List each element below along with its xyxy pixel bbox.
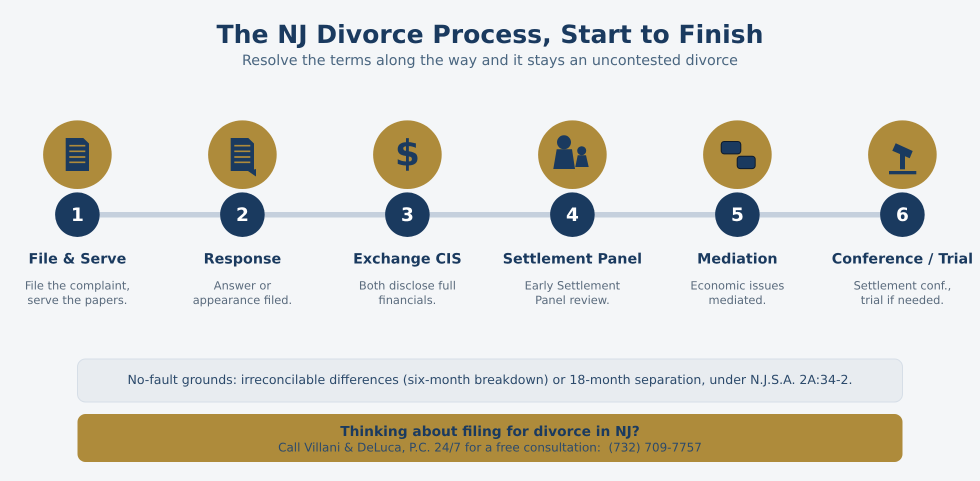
- step heading: File & Serve: [29, 252, 126, 268]
- step description: Economic issues: [690, 278, 784, 292]
- icon: gavel: [868, 120, 937, 189]
- number badge 4: [550, 192, 595, 237]
- icon: document with arrow: [208, 120, 277, 189]
- call to action banner: [78, 414, 902, 462]
- step 2: Response: [193, 120, 292, 307]
- call to action banner: Thinking about filing for divorce in NJ?: [340, 424, 640, 440]
- number badge 1: [55, 192, 100, 237]
- number badge 6: 6: [896, 205, 909, 226]
- step description: File the complaint,: [25, 278, 130, 292]
- number badge 2: 2: [236, 205, 249, 226]
- icon: speech boxes: [703, 120, 772, 189]
- step description: Answer or: [214, 278, 271, 292]
- step description: Panel review.: [535, 293, 610, 307]
- step heading: Response: [204, 252, 281, 268]
- step description: financials.: [379, 293, 436, 307]
- step heading: Settlement Panel: [503, 252, 642, 268]
- step description: trial if needed.: [861, 293, 944, 307]
- step 3: Exchange CIS: [353, 120, 462, 307]
- call to action banner: Call Villani & DeLuca, P.C. 24/7 for a free consultation: (732) 709-7757: [278, 440, 702, 454]
- step 6: Conference / Trial: [832, 120, 973, 307]
- icon: dollar sign: [373, 120, 442, 189]
- step 1: File & Serve: [25, 120, 130, 307]
- step heading: Mediation: [697, 252, 778, 268]
- step 4: Settlement Panel: [503, 120, 642, 307]
- icon: dollar sign: $: [395, 134, 420, 174]
- note panel: no-fault grounds: [78, 359, 902, 402]
- title: The NJ Divorce Process, Start to Finish: [217, 20, 763, 49]
- note panel: no-fault grounds: No-fault grounds: irreconcilable differences (six-month breakdown) or 18-month separation, under N.J.S.A. 2A:34-2.: [128, 372, 852, 387]
- number badge 3: [385, 192, 430, 237]
- number badge 4: 4: [566, 205, 579, 226]
- icon: document: [43, 120, 112, 189]
- number badge 1: 1: [71, 205, 84, 226]
- number badge 2: [220, 192, 265, 237]
- step description: mediated.: [708, 293, 766, 307]
- step description: Both disclose full: [359, 278, 456, 292]
- step description: serve the papers.: [27, 293, 127, 307]
- step heading: Exchange CIS: [353, 252, 462, 268]
- timeline line: [77, 212, 902, 218]
- step heading: Conference / Trial: [832, 252, 973, 268]
- step description: Early Settlement: [525, 278, 621, 292]
- number badge 5: [715, 192, 760, 237]
- icon: two people: [538, 120, 607, 189]
- number badge 3: 3: [401, 205, 414, 226]
- number badge 6: [880, 192, 925, 237]
- step description: appearance filed.: [193, 293, 292, 307]
- subtitle: Resolve the terms along the way and it stays an uncontested divorce: [242, 53, 738, 69]
- number badge 5: 5: [731, 205, 744, 226]
- step description: Settlement conf.,: [854, 278, 951, 292]
- step 5: Mediation: [690, 120, 784, 307]
